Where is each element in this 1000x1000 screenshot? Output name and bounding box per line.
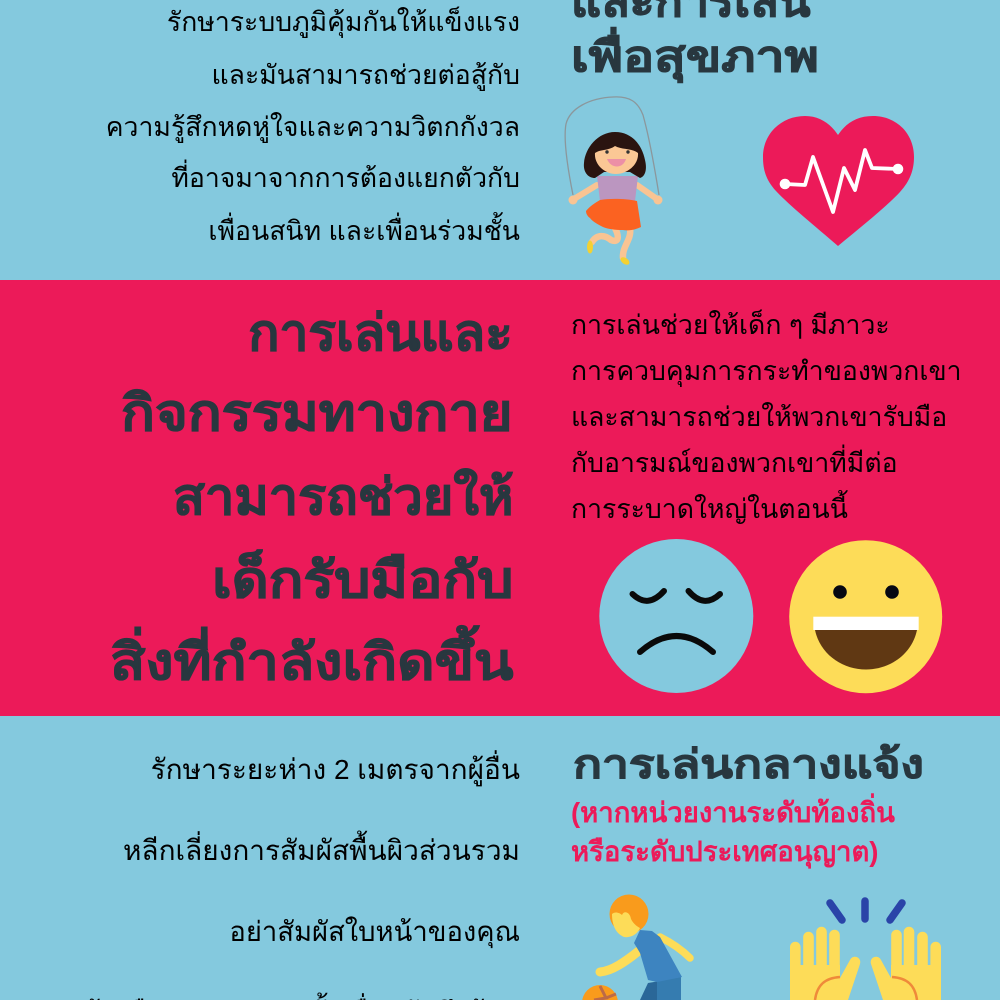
heading: play and physical activity: กิจกรรมทางกาย — [121, 385, 513, 441]
heading: play and physical activity: การเล่นและ — [248, 305, 513, 361]
heading: play for health: เพื่อสุขภาพ — [571, 33, 819, 80]
heading: outdoor play: การเล่นกลางแจ้ง — [573, 743, 924, 787]
text block: emotional control paragraph — [571, 310, 962, 524]
heading: play and physical activity: สิ่งที่กำลังเกิดขึ้น — [110, 634, 513, 690]
icon: heart with pulse line — [763, 116, 914, 246]
text block: emotional control paragraph: การระบาดใหญ่ในตอนนี้ — [571, 494, 848, 524]
heading: play and physical activity: สามารถช่วยให้ — [173, 469, 513, 525]
icon: raised hands with spark lines — [790, 901, 941, 1000]
text block: immune system paragraph: และมันสามารถช่วยต่อสู้กับ — [212, 60, 520, 90]
text block: emotional control paragraph: กับอารมณ์ของพวกเขาที่มีต่อ — [571, 448, 898, 478]
panel: bottom blue background — [0, 716, 1000, 1000]
heading: play and physical activity — [110, 305, 514, 690]
text block: emotional control paragraph: การควบคุมการกระทำของพวกเขา — [571, 356, 962, 386]
heading: play and physical activity: เด็กรับมือกับ — [212, 552, 513, 608]
text block: safety rules list: หลีกเลี่ยงการสัมผัสพื้นผิวส่วนรวม — [123, 835, 520, 866]
callout: if local or national authority permits — [571, 793, 895, 869]
text block: emotional control paragraph: และสามารถช่วยให้พวกเขารับมือ — [571, 402, 947, 432]
text block: safety rules list — [84, 750, 520, 1000]
heading: play for health — [571, 0, 819, 84]
text block: immune system paragraph — [106, 6, 520, 246]
callout: if local or national authority permits: (หากหน่วยงานระดับท้องถิ่น — [571, 797, 895, 828]
icon: happy face — [789, 540, 942, 693]
icon: boy dribbling a basketball — [582, 894, 690, 1000]
panel: red middle background — [0, 280, 1000, 716]
text block: emotional control paragraph: การเล่นช่วยให้เด็ก ๆ มีภาวะ — [571, 310, 890, 340]
text block: safety rules list: อย่าสัมผัสใบหน้าของคุณ — [229, 916, 520, 947]
callout: if local or national authority permits: หรือระดับประเทศอนุญาต) — [571, 836, 878, 867]
icon: girl jumping rope — [565, 97, 662, 266]
text block: safety rules list: รักษาระยะห่าง 2 เมตรจากผู้อื่น — [151, 754, 520, 785]
panel: top blue background — [0, 0, 1000, 280]
text block: immune system paragraph: ความรู้สึกหดหู่ใจและความวิตกกังวล — [106, 112, 520, 142]
icon: sad face — [599, 539, 753, 693]
text block: immune system paragraph: ที่อาจมาจากการต้องแยกตัวกับ — [171, 163, 520, 193]
text block: immune system paragraph: เพื่อนสนิท และเพื่อนร่วมชั้น — [208, 216, 520, 246]
text block: immune system paragraph: รักษาระบบภูมิคุ้มกันให้แข็งแรง — [167, 7, 520, 37]
